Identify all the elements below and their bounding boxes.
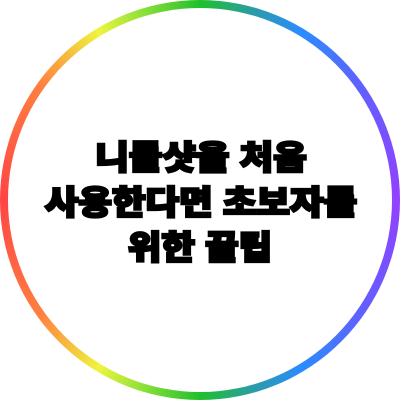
title line 1: 니들샷을 처음 [95, 139, 307, 176]
title line 3: 위한 꿀팁 [128, 229, 272, 266]
title line 2: 사용한다면 초보자를 [45, 184, 357, 221]
